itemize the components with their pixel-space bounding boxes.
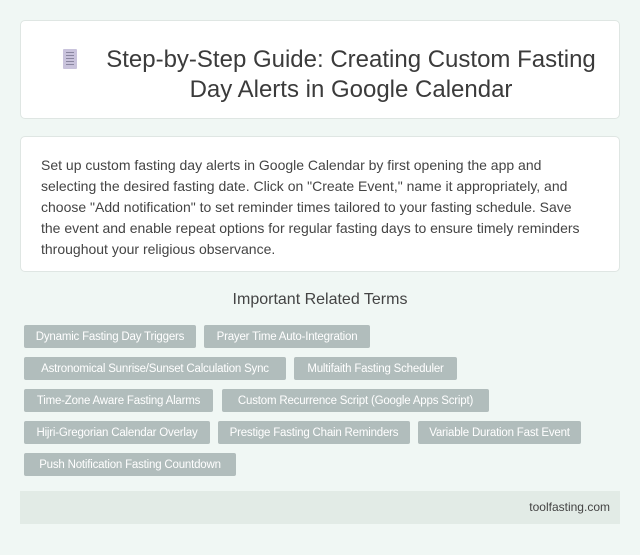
footer [20, 491, 620, 524]
tags: Prestige Fasting Chain Reminders [230, 427, 398, 439]
tags: Variable Duration Fast Event [429, 427, 570, 439]
tags: Multifaith Fasting Scheduler [307, 363, 444, 375]
title: Step-by-Step Guide: Creating Custom Fasting Day Alerts in Google Calendar [106, 46, 596, 103]
icon: document [63, 49, 77, 69]
header card [20, 20, 620, 119]
footer source: toolfasting.com [529, 500, 610, 514]
tags: Push Notification Fasting Countdown [39, 459, 221, 471]
tags: Prayer Time Auto-Integration [217, 331, 357, 343]
tags: Dynamic Fasting Day Triggers [36, 331, 184, 343]
tags: Time-Zone Aware Fasting Alarms [37, 395, 200, 407]
description card [20, 136, 620, 272]
related terms heading: Important Related Terms [233, 291, 407, 308]
tags: Custom Recurrence Script (Google Apps Script) [238, 395, 473, 407]
description text: Set up custom fasting day alerts in Google Calendar by first opening the app and selecting the desired fasting date. Click on "Create Event," name it appropriately, and choose "Add notification" to set reminder times tailored to your fasting schedule. Save the event and enable repeat options for regular fasting days to ensure timely reminders throughout your religious observance. [41, 157, 580, 257]
tags: Astronomical Sunrise/Sunset Calculation Sync [41, 363, 269, 375]
tags: Hijri-Gregorian Calendar Overlay [36, 427, 198, 439]
